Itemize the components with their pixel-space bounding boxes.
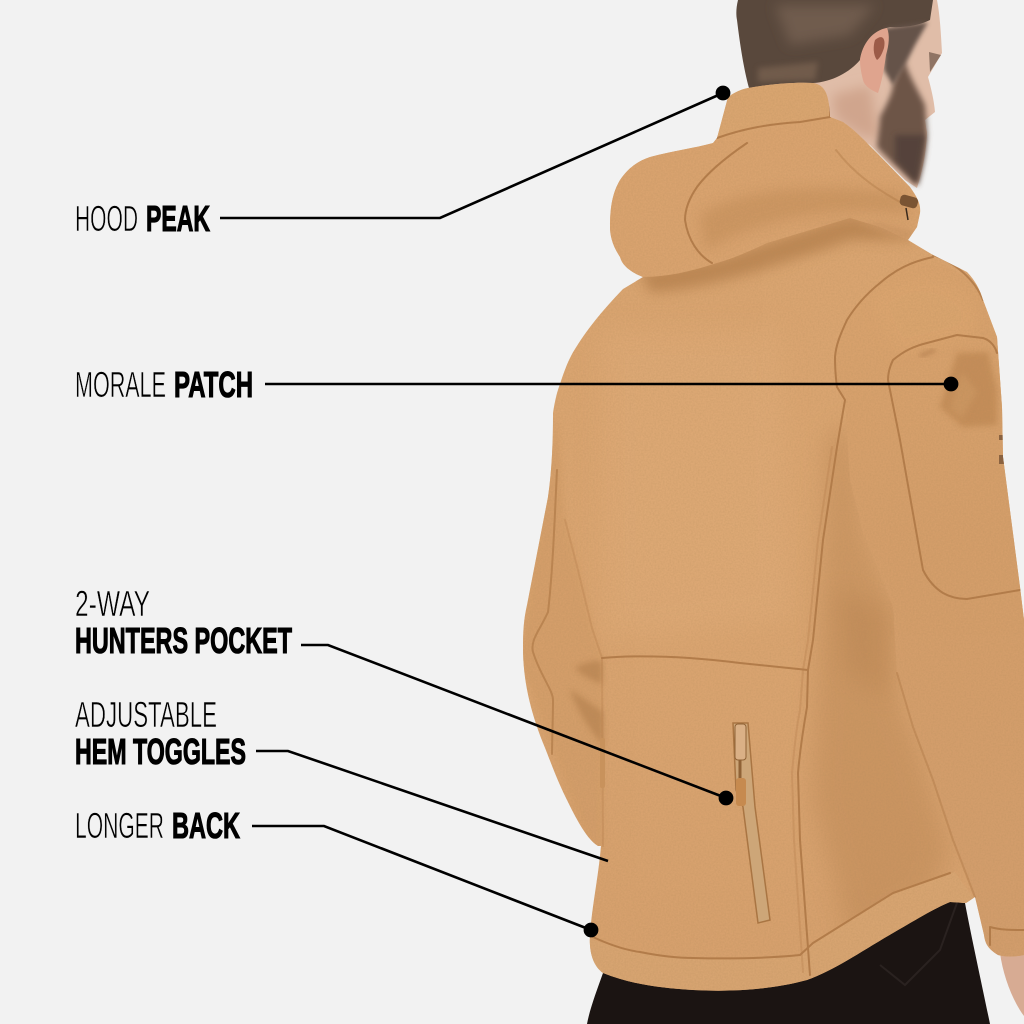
hem band (590, 878, 974, 991)
label bold: patch: PATCH (174, 364, 253, 405)
sleeve right (975, 283, 1024, 956)
hood inner shadow (702, 189, 904, 243)
hood front seam (836, 150, 905, 205)
inner ear (874, 37, 885, 60)
shoulder top seam (933, 255, 983, 300)
hand (1000, 948, 1024, 1016)
label: morale: MORALE (75, 364, 166, 405)
leader line (265, 383, 951, 385)
jacket base (500, 70, 1024, 1000)
label bold: hem toggles: HEM TOGGLES (75, 731, 246, 772)
callout: hem toggles (75, 694, 608, 861)
dot (584, 923, 598, 937)
hair (736, 0, 933, 88)
dot (719, 791, 733, 805)
hood lower right fold (878, 225, 913, 240)
shadow under hood (640, 215, 915, 292)
label: 2-way: 2-WAY (75, 583, 150, 624)
dot (944, 377, 958, 391)
hood (610, 117, 920, 277)
beard (877, 62, 927, 186)
arm left tone (520, 420, 603, 850)
armpit side shadow (816, 437, 944, 920)
leader line (301, 645, 726, 798)
callout: longer back (75, 805, 598, 937)
label bold: hunters pocket: HUNTERS POCKET (75, 620, 292, 661)
second raglan seam line (792, 447, 832, 972)
pocket zipper (733, 723, 770, 923)
leader line (252, 826, 591, 930)
dot (716, 86, 730, 100)
arm fold shadow (570, 661, 603, 745)
cuff seam (990, 927, 1024, 945)
back sleeve edge (897, 673, 975, 897)
leader line (220, 93, 723, 218)
callout: morale patch (75, 364, 958, 405)
body shading (640, 215, 950, 940)
hood seam (685, 143, 747, 263)
hem seam (593, 873, 950, 958)
callout: hood peak (75, 86, 730, 239)
left sleeve seam (532, 470, 557, 754)
body highlight (600, 330, 790, 640)
fleece texture (500, 70, 1024, 1000)
collar base seam (716, 106, 831, 139)
trouser pocket line (880, 900, 958, 985)
morale patch panel (888, 335, 1020, 599)
sleeve right hardware (999, 435, 1004, 464)
sleeve shoulder highlight (870, 278, 975, 355)
neck and face (748, 0, 942, 188)
ear (860, 28, 889, 93)
leader line (256, 751, 608, 861)
hair neckline fade (758, 62, 818, 82)
torso and arm edge (565, 520, 603, 846)
deep fold near sleeve (835, 590, 890, 700)
label bold: peak: PEAK (146, 198, 210, 239)
label: longer: LONGER (75, 805, 164, 846)
hair highlight (775, 5, 875, 45)
pocket seam (602, 656, 808, 670)
trousers (587, 900, 990, 1024)
velcro patch (940, 352, 997, 427)
label bold: back: BACK (172, 805, 240, 846)
eye brow (929, 52, 941, 72)
hood toggle (899, 194, 919, 220)
model photo illustration (500, 0, 1024, 1024)
face shadow (832, 85, 880, 140)
patch inner light (957, 388, 970, 408)
collar (717, 83, 830, 138)
raglan seam (798, 257, 933, 975)
beard chin shadow (895, 135, 925, 184)
callout: hunters pocket (75, 583, 733, 805)
left pocket zipper (600, 738, 605, 788)
patch crease (920, 350, 935, 356)
label: hood peak: HOOD (75, 198, 138, 239)
label: adjustable: ADJUSTABLE (75, 694, 217, 735)
jacket (500, 70, 1024, 1000)
sideburn (884, 22, 928, 85)
